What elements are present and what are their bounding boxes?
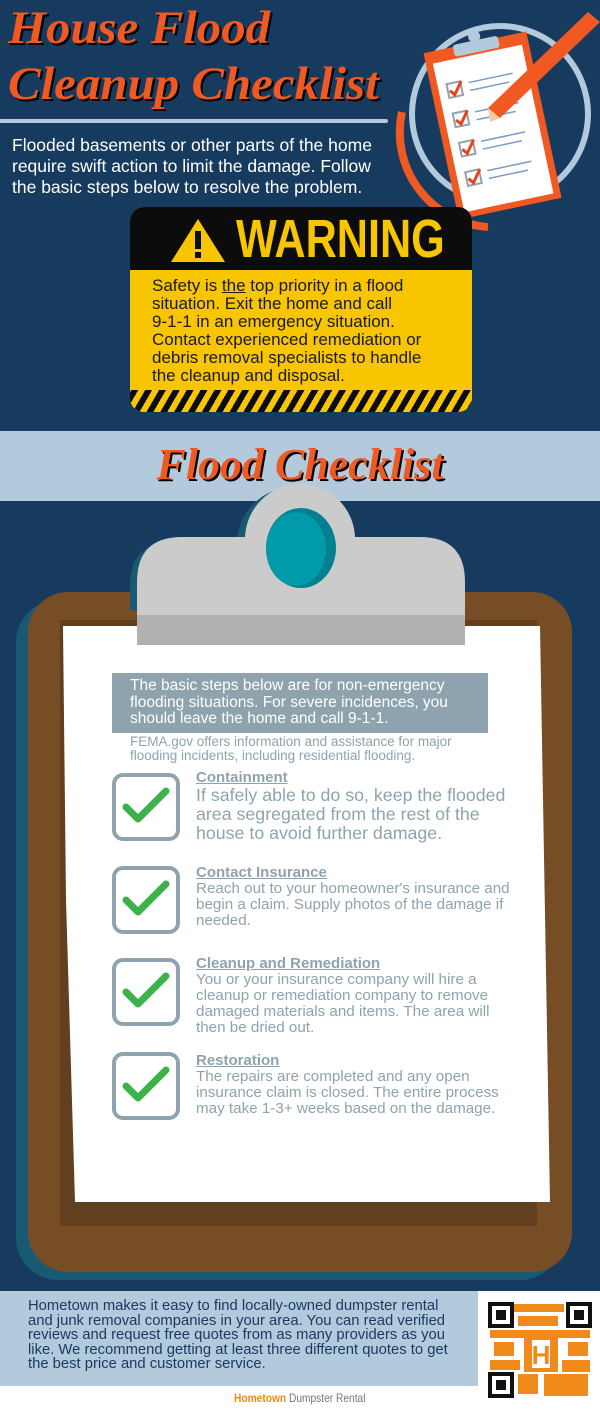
clipboard	[16, 484, 572, 1280]
footer text panel	[0, 1291, 478, 1386]
text: then be dried out.	[196, 1019, 314, 1036]
step: contact insurance: begin a claim. Supply photos of the damage if	[196, 896, 503, 913]
section heading band: Flood Checklist	[156, 440, 444, 489]
step: contact insurance	[112, 864, 510, 934]
warning text: debris removal specialists to handle	[152, 348, 421, 367]
section heading band	[0, 431, 600, 501]
icon: clipboard with pencil in circle	[396, 12, 600, 231]
step: containment: Containment	[196, 769, 288, 786]
warning header	[130, 207, 472, 270]
warning text: Contact experienced remediation or	[152, 330, 421, 349]
step: contact insurance: Contact Insurance	[196, 864, 327, 881]
warning text: the cleanup and disposal.	[152, 366, 345, 385]
footer text panel: Hometown makes it easy to find locally-owned dumpster rental	[28, 1298, 438, 1314]
warning text	[152, 276, 421, 385]
QR code: H	[532, 1340, 550, 1370]
footer text panel: the best price and customer service.	[28, 1356, 266, 1372]
note box: should leave the home and call 9-1-1.	[130, 710, 388, 727]
footer text panel: and junk removal companies in your area. You can read verified	[28, 1312, 445, 1328]
step: containment	[112, 769, 505, 843]
step: cleanup and remediation: You or your insurance company will hire a	[196, 971, 477, 988]
note box: flooding situations. For severe incidences, you	[130, 694, 448, 710]
step: contact insurance: needed.	[196, 912, 251, 929]
step: containment: If safely able to do so, keep the flooded	[196, 785, 505, 805]
step: restoration	[112, 1052, 499, 1120]
FEMA note: FEMA.gov offers information and assistance for major	[130, 734, 452, 749]
note box	[112, 673, 488, 733]
warning text: Safety is the top priority in a flood	[152, 276, 403, 295]
FEMA note	[130, 734, 452, 763]
intro text: the basic steps below to resolve the problem.	[12, 177, 362, 197]
icon: checkbox	[112, 1052, 180, 1120]
QR code	[488, 1302, 592, 1398]
step: restoration: The repairs are completed and any open	[196, 1068, 470, 1085]
icon: checkbox	[112, 866, 180, 934]
warning box	[130, 207, 472, 412]
title: Cleanup Checklist	[8, 58, 379, 110]
step: contact insurance: Reach out to your homeowner's insurance and	[196, 880, 510, 897]
step: cleanup and remediation: Cleanup and Remediation	[196, 955, 380, 972]
step: restoration: Restoration	[196, 1052, 279, 1069]
footer	[0, 1291, 600, 1412]
intro text	[12, 135, 372, 197]
step: cleanup and remediation	[112, 955, 490, 1036]
step: restoration: may take 1-3+ weeks based on the damage.	[196, 1100, 495, 1117]
intro text: require swift action to limit the damage. Follow	[12, 156, 371, 176]
icon: checkbox	[112, 773, 180, 841]
step: cleanup and remediation: damaged materials and items. The area will	[196, 1003, 490, 1020]
step: containment: house to avoid further damage.	[196, 823, 442, 843]
warning header: WARNING	[236, 209, 445, 269]
step: cleanup and remediation: cleanup or remediation company to remove	[196, 987, 488, 1004]
warning text: situation. Exit the home and call	[152, 294, 392, 313]
step: containment: area segregated from the rest of the	[196, 804, 480, 824]
note box: The basic steps below are for non-emergency	[130, 677, 444, 694]
FEMA note: flooding incidents, including residential flooding.	[130, 748, 415, 762]
logo: Hometown Dumpster Rental	[234, 1391, 366, 1405]
intro text: Flooded basements or other parts of the home	[12, 135, 372, 155]
footer text panel: reviews and request free quotes from as many providers as you	[28, 1327, 445, 1343]
title	[8, 2, 382, 111]
warning text: 9-1-1 in an emergency situation.	[152, 312, 395, 331]
step: restoration: insurance claim is closed. The entire process	[196, 1084, 499, 1101]
footer text panel: like. We recommend getting at least three different quotes to get	[28, 1342, 448, 1358]
title: House Flood	[8, 2, 270, 54]
icon: checkbox	[112, 958, 180, 1026]
